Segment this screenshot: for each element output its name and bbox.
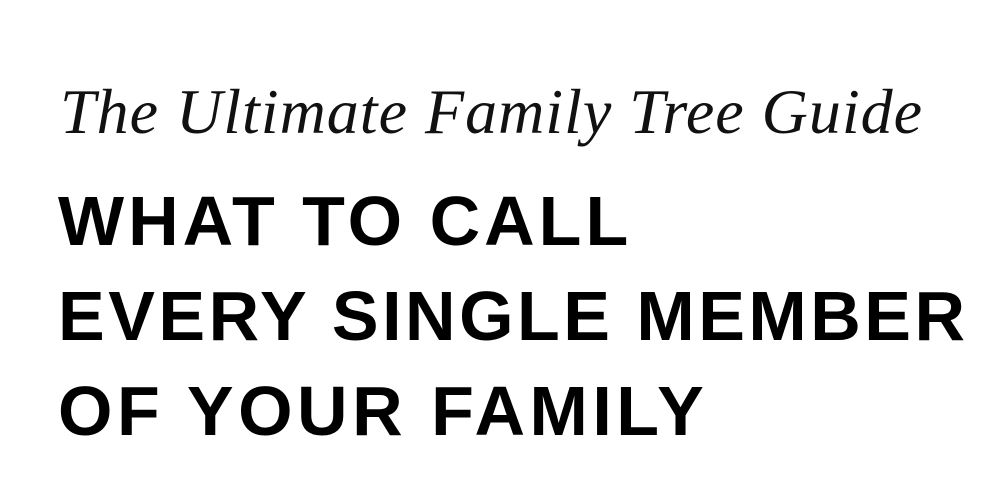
heading line 1: WHAT TO CALL	[58, 182, 632, 260]
heading line 2: EVERY SINGLE MEMBER	[58, 277, 969, 355]
script title: The Ultimate Family Tree Guide	[60, 76, 923, 147]
heading line 3: OF YOUR FAMILY	[58, 372, 708, 450]
